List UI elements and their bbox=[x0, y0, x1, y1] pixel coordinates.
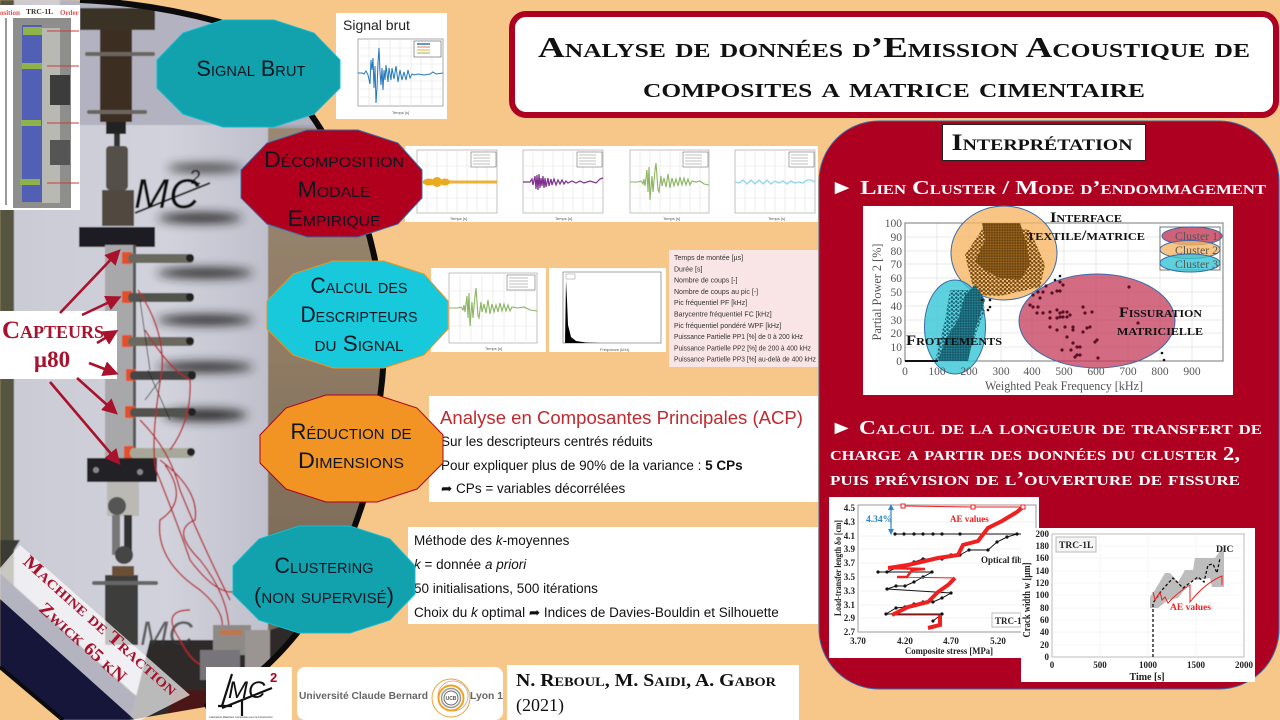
photo: tensile testing machine in black disc bbox=[0, 0, 400, 720]
load-transfer length chart bbox=[829, 497, 1039, 658]
clustering text block: k = donnée a priori bbox=[414, 557, 527, 572]
legend: Cluster 2 bbox=[1175, 245, 1218, 257]
step: clustering: (non supervisé) bbox=[254, 583, 394, 608]
ACP text block: ➦ CPs = variables décorrélées bbox=[441, 481, 626, 496]
descriptors list bbox=[669, 250, 818, 367]
logo Universite Lyon 1: Lyon 1 bbox=[470, 691, 503, 702]
TRC-1L tag: TRC-1L bbox=[1059, 541, 1093, 551]
logo Universite Lyon 1: Université Claude Bernard bbox=[299, 691, 428, 702]
x ticks: 1000 bbox=[1139, 660, 1158, 670]
x ticks: 4.20 bbox=[897, 636, 913, 646]
sensor 1 bbox=[122, 252, 194, 264]
EMD chart 2: Temps [s] bbox=[555, 216, 572, 221]
raw signal chart bbox=[336, 13, 447, 119]
authors bbox=[507, 665, 799, 720]
x axis tick labels: 800 bbox=[1151, 366, 1169, 378]
photo: tensile testing machine in black disc: 2 bbox=[190, 167, 201, 189]
relay boxes bbox=[213, 625, 251, 655]
logo LMC2 bbox=[206, 667, 292, 720]
y ticks: 180 bbox=[1036, 541, 1050, 551]
panel: interpretation bbox=[819, 121, 1279, 689]
title box: composites a matrice cimentaire bbox=[643, 72, 1145, 104]
y ticks: 3.9 bbox=[844, 544, 856, 554]
annotation: frottements: Frottements bbox=[906, 333, 1002, 349]
descriptor spectrum chart: Fréquence [kHz] bbox=[600, 347, 629, 352]
y axis tick labels: 0 bbox=[896, 356, 902, 368]
EMD chart 4 bbox=[735, 150, 815, 221]
4.34% arrow: 4.34% bbox=[866, 515, 892, 525]
photo: tensile testing machine in black disc: MC bbox=[140, 615, 193, 653]
x ticks: 4.70 bbox=[943, 636, 959, 646]
y ticks: 2.7 bbox=[844, 627, 856, 637]
descriptors list: Pic fréquentiel PF [kHz] bbox=[674, 300, 747, 307]
x ticks: 0 bbox=[1050, 660, 1055, 670]
step: signal brut: Signal Brut bbox=[196, 56, 306, 81]
y axis tick labels: 60 bbox=[890, 273, 902, 285]
crack width chart: Time [s] bbox=[1129, 672, 1165, 683]
descriptors list: Nombre de coups [-] bbox=[674, 278, 737, 285]
step: clustering bbox=[233, 526, 415, 633]
specimen image with DIC strain bands: TRC-1L bbox=[26, 7, 53, 16]
x axis tick labels: 300 bbox=[992, 366, 1010, 378]
sub-heading: transfer length: charge a partir des données du cluster 2, bbox=[830, 444, 1240, 465]
legend: Cluster 1 bbox=[1175, 231, 1218, 243]
red AE series bbox=[888, 504, 1025, 628]
y axis tick labels: 70 bbox=[890, 259, 902, 271]
x axis tick labels bbox=[902, 366, 1201, 378]
cluster 1 points bbox=[1030, 282, 1138, 358]
clustering text block: Choix du k optimal ➦ Indices de Davies-Bouldin et Silhouette bbox=[414, 605, 779, 620]
descriptors list: Puissance Partielle PP1 [%] de 0 à 200 kHz bbox=[674, 334, 803, 341]
y ticks: 3.1 bbox=[844, 600, 856, 610]
y ticks bbox=[844, 503, 856, 637]
load-transfer length chart: Optical fib bbox=[981, 555, 1022, 565]
cluster 2 points bbox=[965, 223, 1045, 296]
legend bbox=[1160, 227, 1222, 272]
y axis tick labels: 10 bbox=[890, 342, 902, 354]
authors: (2021) bbox=[516, 695, 564, 716]
x axis tick labels: 700 bbox=[1119, 366, 1137, 378]
clustering text block: Méthode des k-moyennes bbox=[414, 533, 570, 548]
annotation: fissuration bbox=[1117, 305, 1203, 339]
step: calcul des descripteurs: Descripteurs bbox=[300, 302, 418, 327]
authors: N. Reboul, M. Saidi, A. Gabor bbox=[516, 670, 777, 690]
x axis tick labels: 500 bbox=[1055, 366, 1073, 378]
descriptors list: Nombre de coups au pic [-] bbox=[674, 289, 758, 296]
descriptors list: Pic fréquentiel pondéré WPF [kHz] bbox=[674, 323, 781, 330]
y ticks: 60 bbox=[1040, 615, 1050, 625]
MC2 logo on panel: MC bbox=[134, 170, 200, 217]
upper grip bbox=[79, 227, 155, 247]
lower grip bbox=[87, 458, 157, 482]
descriptor spectrum chart bbox=[549, 268, 666, 352]
step: reduction de dimensions: Réduction de bbox=[290, 419, 412, 444]
x ticks: 5.20 bbox=[990, 636, 1006, 646]
y ticks: 0 bbox=[1044, 652, 1050, 662]
y ticks: 140 bbox=[1036, 566, 1050, 576]
TRC-1 tag bbox=[992, 613, 1022, 627]
y ticks: 80 bbox=[1040, 603, 1050, 613]
clustering text block bbox=[408, 527, 818, 624]
x ticks: 500 bbox=[1093, 660, 1107, 670]
y axis tick labels: 20 bbox=[890, 328, 902, 340]
crack width chart bbox=[1021, 528, 1255, 683]
DIC dashed curve bbox=[1153, 558, 1220, 657]
legend: Cluster 3 bbox=[1175, 259, 1218, 271]
annotation: interface: Interface bbox=[1050, 210, 1122, 226]
y axis tick labels: 80 bbox=[890, 246, 902, 258]
ACP text block: Pour expliquer plus de 90% de la variance : 5 CPs bbox=[441, 458, 743, 473]
EMD chart 4: Temps [s] bbox=[768, 216, 785, 221]
y ticks: 4.1 bbox=[844, 531, 856, 541]
x axis tick labels: 600 bbox=[1087, 366, 1105, 378]
sub-heading: cluster link: ► Lien Cluster / Mode d’endommagement bbox=[830, 177, 1267, 199]
crack width chart: AE values bbox=[1170, 603, 1211, 613]
y ticks: 3.5 bbox=[844, 572, 856, 582]
x axis tick labels: 900 bbox=[1183, 366, 1201, 378]
y ticks: 3.3 bbox=[844, 586, 856, 596]
interpretation heading bbox=[942, 124, 1146, 160]
sub-heading: transfer length bbox=[830, 418, 1262, 490]
black optical fibre series bbox=[878, 534, 1037, 621]
y ticks: 2.9 bbox=[844, 613, 856, 623]
y ticks: 20 bbox=[1040, 640, 1050, 650]
descriptor time chart: Temps [s] bbox=[485, 346, 502, 351]
clustering text block: 50 initialisations, 500 itérations bbox=[414, 581, 598, 596]
descriptors list: Puissance Partielle PP3 [%] au-delà de 400 kHz bbox=[674, 357, 816, 364]
x axis tick labels: 200 bbox=[960, 366, 978, 378]
EMD mode charts bbox=[405, 146, 818, 222]
y axis tick labels: 100 bbox=[885, 218, 902, 230]
annotation: interface: textile/matrice bbox=[1027, 228, 1145, 244]
descriptor time chart bbox=[431, 268, 546, 352]
cluster 3 points bbox=[935, 285, 985, 361]
raw signal chart: Signal brut bbox=[343, 17, 410, 33]
x ticks bbox=[1050, 660, 1254, 670]
cluster 3 ellipse bbox=[924, 280, 986, 374]
step: reduction de dimensions: Dimensions bbox=[298, 448, 404, 473]
EMD chart 3: Temps [s] bbox=[663, 216, 680, 221]
step: calcul des descripteurs: Calcul des bbox=[310, 273, 408, 298]
upper actuator bbox=[80, 8, 155, 30]
x ticks: 1500 bbox=[1187, 660, 1206, 670]
EMD chart 1 bbox=[417, 150, 497, 221]
step: decomposition modale empirique: Modale bbox=[298, 177, 370, 202]
specimen image caption: osition bbox=[0, 9, 20, 17]
logo LMC2: 2 bbox=[270, 670, 277, 685]
x ticks: 3.70 bbox=[850, 636, 866, 646]
descriptors list: Puissance Partielle PP2 [%] de 200 à 400 kHz bbox=[674, 345, 811, 352]
x ticks: 2000 bbox=[1235, 660, 1254, 670]
y axis tick labels: 40 bbox=[890, 301, 902, 313]
y axis tick labels: 30 bbox=[890, 315, 902, 327]
step: decomposition modale empirique: Décomposition bbox=[264, 147, 404, 172]
EMD chart 3 bbox=[630, 150, 709, 221]
logo Universite Lyon 1: UCB bbox=[446, 696, 457, 702]
step: reduction de dimensions bbox=[260, 395, 443, 502]
y ticks: 160 bbox=[1036, 553, 1050, 563]
annotation: interface bbox=[1027, 210, 1145, 244]
y ticks: 4.3 bbox=[844, 517, 856, 527]
interpretation heading: Interprétation bbox=[952, 130, 1133, 155]
y ticks: 120 bbox=[1036, 578, 1050, 588]
y ticks: 3.7 bbox=[844, 558, 856, 568]
machine label band: Zwick 65 kN bbox=[35, 598, 131, 686]
AE values curve bbox=[1153, 576, 1222, 603]
EMD chart 2 bbox=[523, 150, 603, 221]
y axis tick labels: 90 bbox=[890, 232, 902, 244]
y ticks: 100 bbox=[1036, 590, 1050, 600]
4.34% arrow bbox=[866, 504, 894, 535]
step: decomposition modale empirique: Empirique bbox=[288, 206, 380, 231]
descriptors list: Barycentre fréquentiel FC [kHz] bbox=[674, 312, 772, 318]
ACP text block: Sur les descripteurs centrés réduits bbox=[441, 434, 653, 449]
sub-heading: transfer length: ► Calcul de la longueur de transfert de bbox=[830, 418, 1262, 439]
ACP text block bbox=[429, 396, 818, 502]
y ticks bbox=[1036, 529, 1050, 662]
ACP text block: Analyse en Composantes Principales (ACP) bbox=[440, 407, 803, 428]
TRC-1 tag: TRC-1 bbox=[995, 616, 1022, 626]
logo Universite Lyon 1 bbox=[297, 667, 503, 720]
title box: Analyse de données d’Emission Acoustique de bbox=[538, 32, 1250, 64]
load-transfer length chart: Load-transfer length δo [cm] bbox=[833, 520, 843, 616]
x axis title: Weighted Peak Frequency [kHz] bbox=[985, 379, 1143, 393]
raw signal chart: Temps [s] bbox=[392, 110, 409, 115]
y axis tick labels: 50 bbox=[890, 287, 902, 299]
y ticks: 40 bbox=[1040, 627, 1050, 637]
y axis tick labels bbox=[885, 218, 902, 368]
specimen image with DIC strain bands bbox=[0, 5, 80, 210]
lower clevis and rods bbox=[107, 482, 139, 516]
specimen bbox=[105, 245, 135, 460]
cluster 1 ellipse bbox=[1019, 274, 1175, 368]
title box bbox=[512, 14, 1276, 115]
TRC-1L tag bbox=[1056, 537, 1096, 552]
x axis tick labels: 100 bbox=[928, 366, 946, 378]
sensor label with arrows bbox=[0, 252, 118, 462]
wires bbox=[138, 290, 240, 667]
load-transfer length chart: Composite stress [MPa] bbox=[905, 647, 993, 657]
cluster 2 ellipse bbox=[951, 206, 1057, 300]
specimen image with DIC strain bands: Order bbox=[60, 9, 79, 17]
cluster scatter chart bbox=[863, 206, 1233, 395]
sensor label with arrows: Capteurs bbox=[2, 317, 104, 344]
y ticks: 4.5 bbox=[844, 503, 856, 513]
crack width chart: Crack width w [µm] bbox=[1022, 562, 1033, 638]
EMD chart 1: Temps [s] bbox=[450, 216, 467, 221]
logo LMC2: Laboratoire Matériaux Composites pour la Construction bbox=[209, 715, 273, 719]
sensor label with arrows: µ80 bbox=[34, 347, 70, 372]
step: signal brut bbox=[157, 20, 340, 127]
y ticks: 200 bbox=[1036, 529, 1050, 539]
x axis tick labels: 400 bbox=[1023, 366, 1041, 378]
step: calcul des descripteurs: du Signal bbox=[314, 331, 404, 356]
machine label band: Machine de Traction bbox=[19, 551, 182, 700]
x ticks bbox=[850, 636, 1006, 646]
crack width chart: DIC bbox=[1216, 545, 1234, 555]
step: decomposition modale empirique bbox=[241, 130, 422, 237]
outlier points bbox=[905, 276, 1164, 361]
step: clustering: Clustering bbox=[274, 553, 374, 578]
annotation: fissuration: Fissuration bbox=[1119, 305, 1202, 321]
y axis title: Partial Power 2 [%] bbox=[870, 244, 884, 340]
step: calcul des descripteurs bbox=[267, 261, 448, 368]
machine label band bbox=[0, 545, 190, 720]
load-transfer length chart: AE values bbox=[950, 514, 989, 524]
descriptors list: Durée [s] bbox=[674, 266, 702, 273]
x axis tick labels: 0 bbox=[902, 366, 908, 378]
logo LMC2: MC bbox=[228, 677, 266, 704]
descriptors list: Temps de montée [µs] bbox=[674, 255, 743, 262]
annotation: fissuration: matricielle bbox=[1117, 323, 1203, 339]
sub-heading: transfer length: puis prévision de l’ouverture de fissure bbox=[830, 469, 1240, 490]
